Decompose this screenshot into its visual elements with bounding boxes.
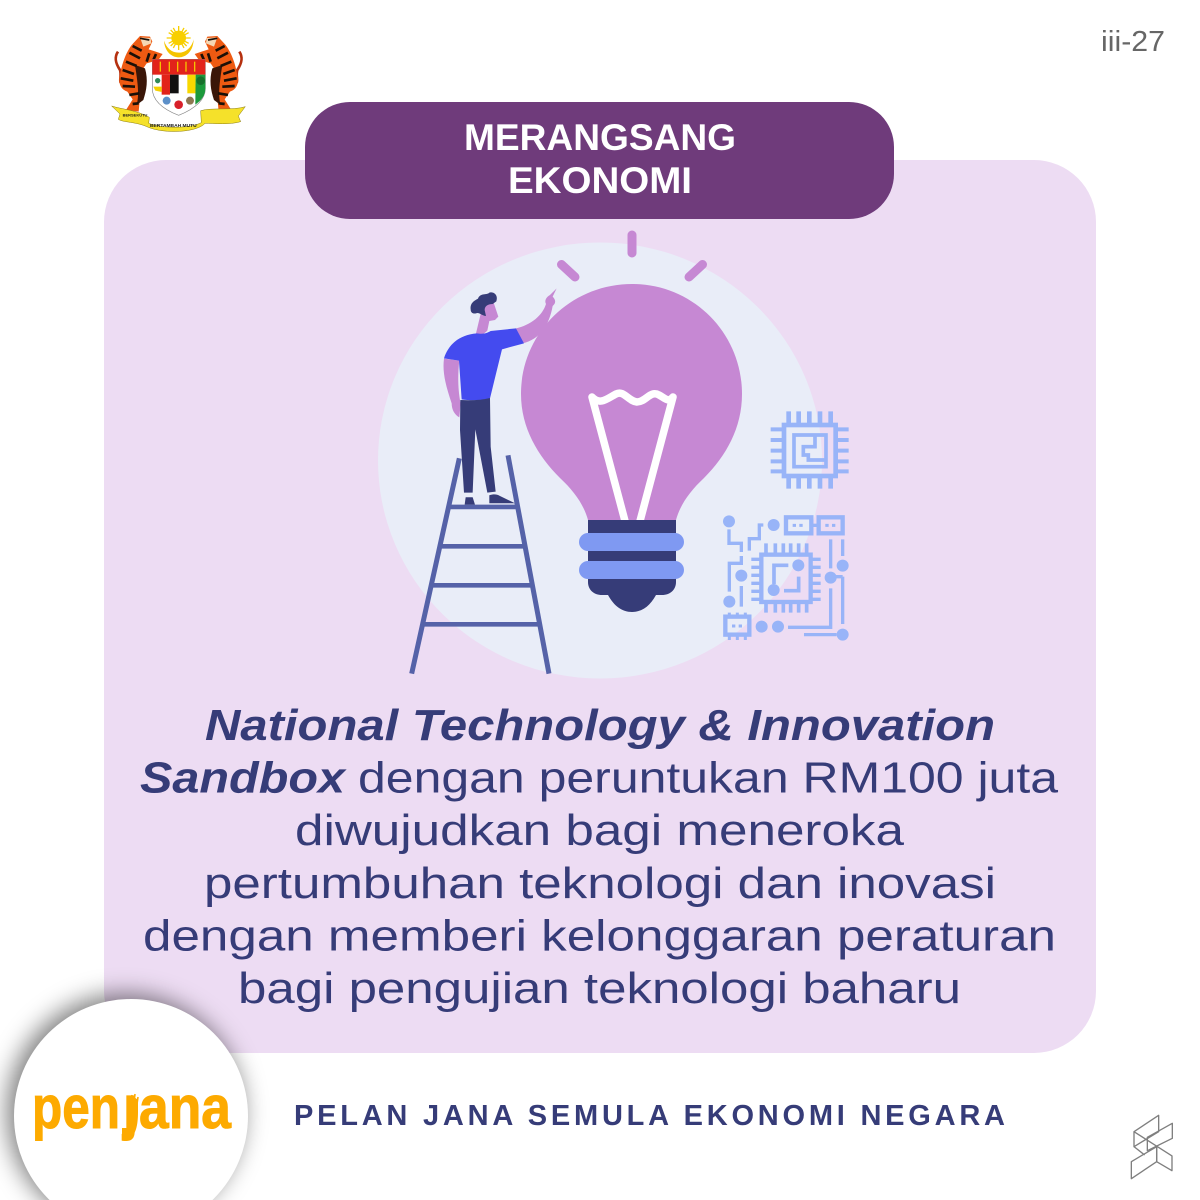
bulb glass [521,284,742,520]
bulb base [588,520,676,612]
person shoes [465,494,515,505]
line 6: bagi pengujian teknologi baharu [238,964,961,1013]
person arms and head [444,288,557,417]
illustration backdrop circle [378,242,822,678]
ladder [412,455,549,674]
person hair [471,292,497,316]
icon: circuit chips [723,411,849,641]
wheat stalk on j [120,1074,139,1138]
icon: lower microchip and traces [725,517,843,640]
icon: crest sun and crescent [164,26,194,57]
person shirt [444,328,524,400]
heading pill [305,102,894,219]
page number: iii-27 [1101,26,1165,58]
icon: upper microchip [771,411,849,489]
icon: light bulb [521,284,742,612]
penjana wordmark: j [122,1074,138,1141]
illustration: man on ladder [412,288,557,674]
penjana wordmark [32,1074,232,1141]
logo shadow [7,994,243,1200]
icon: crest left tiger [116,36,163,112]
line 3: diwujudkan bagi meneroka [295,806,905,855]
icon: crest right tiger [195,36,242,112]
line 1: National Technology & Innovation [205,701,995,750]
circuit nodes [723,515,849,641]
body text [140,701,1059,1013]
icon: corner logo mark [1131,1115,1172,1179]
penjana wordmark: ana [139,1074,232,1141]
line 5: dengan memberi kelonggaran peraturan [143,912,1056,960]
icon: crest motto ribbon: BERTAMBAH MUTU [150,123,197,129]
heading text: MERANGSANG [464,117,736,158]
icon: crest motto ribbon [112,106,245,131]
penjana wordmark: pen [32,1074,120,1141]
icon: crest motto ribbon: BERSEKUTU [123,113,148,118]
icon: light rays [562,235,702,277]
icon: crest shield [152,59,205,115]
bulb filament [592,393,673,521]
line 4: pertumbuhan teknologi dan inovasi [204,859,996,908]
panel: main lilac card [104,160,1096,1053]
penjana logo [14,999,248,1200]
icon: Malaysian coat of arms [112,26,245,131]
footer tagline: PELAN JANA SEMULA EKONOMI NEGARA [294,1100,1005,1132]
heading text: EKONOMI [508,160,692,201]
line 2 regular: dengan peruntukan RM100 juta [358,754,1059,802]
line 2 bold: Sandbox [140,754,347,802]
person trousers [460,398,496,493]
bulb bands [579,533,684,579]
